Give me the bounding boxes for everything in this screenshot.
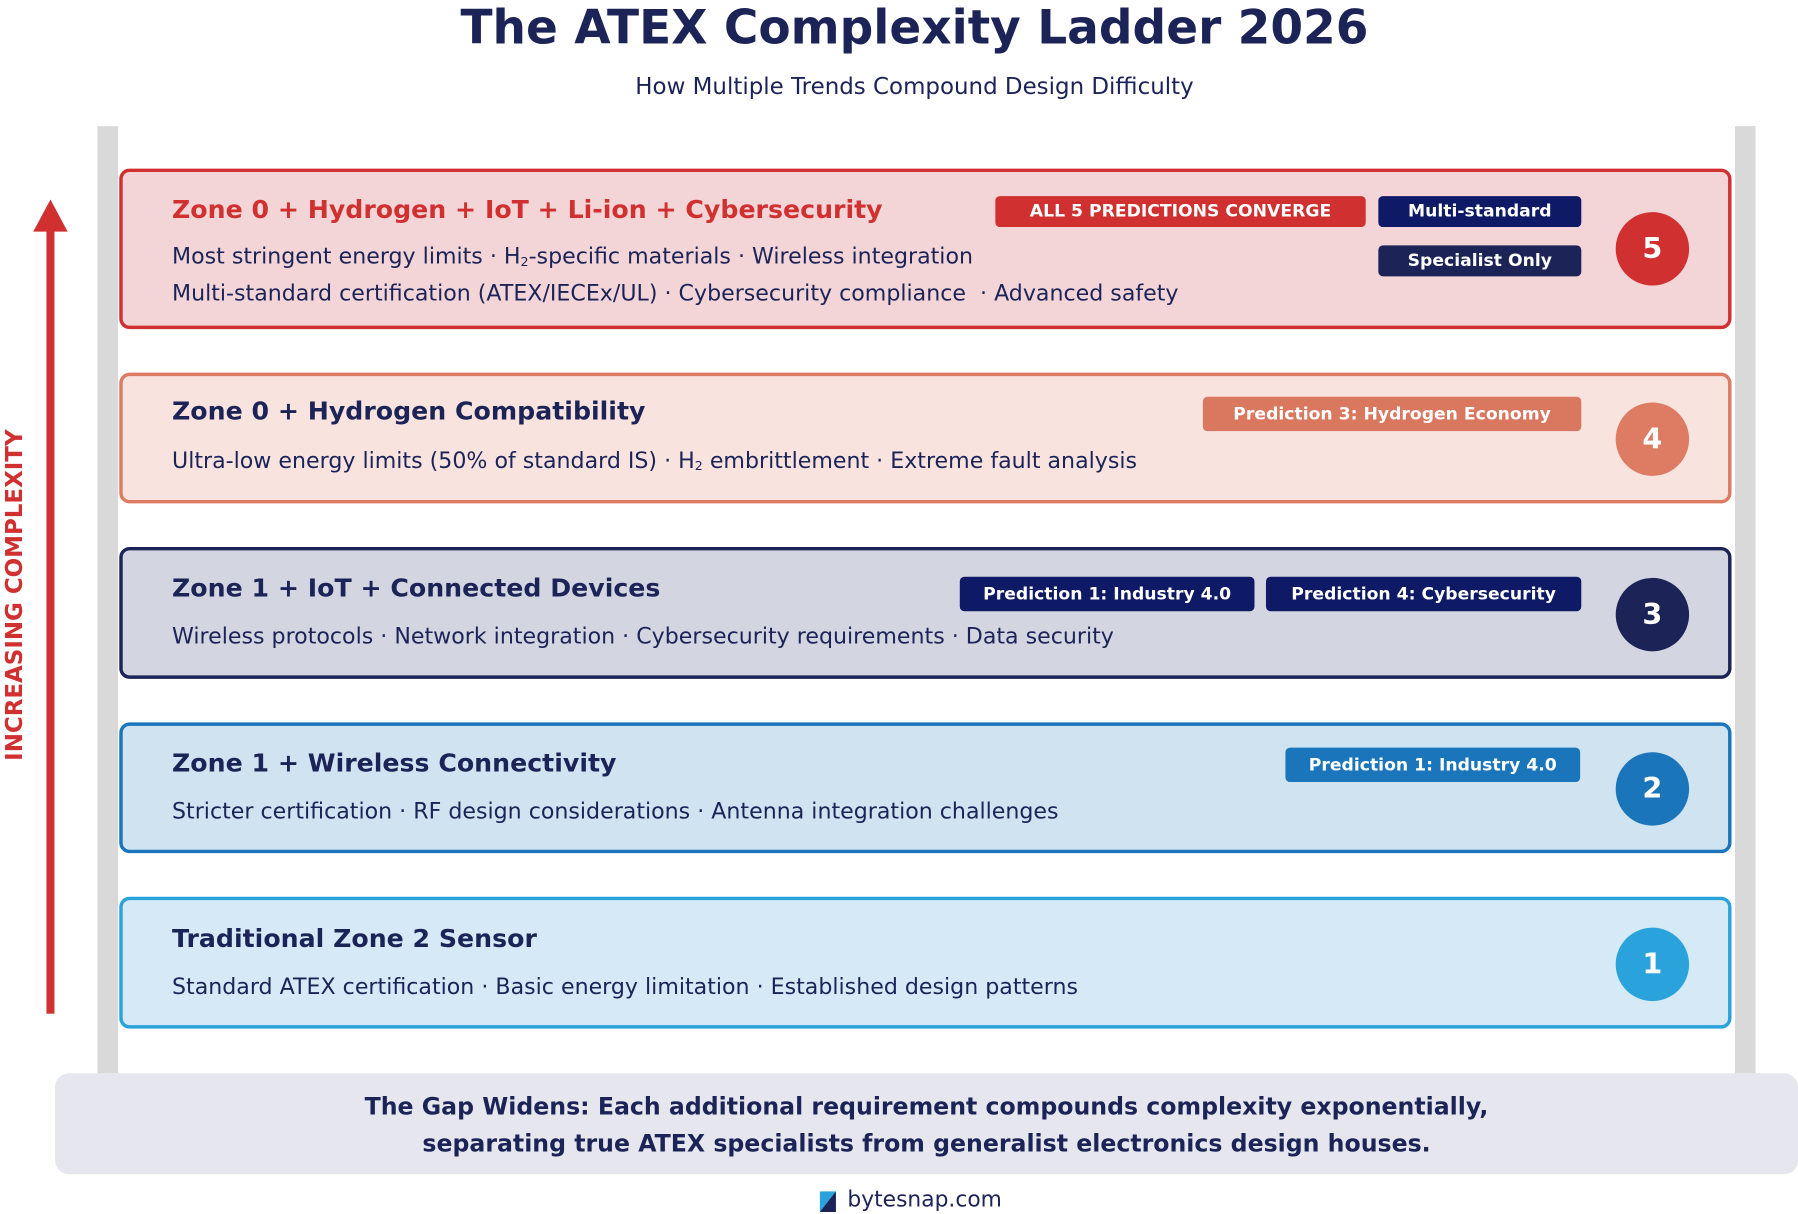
badge: prediction 4	[1266, 577, 1581, 611]
text 1: Standard ATEX certification · Basic energy limitation · Established design patterns	[172, 974, 1078, 1000]
badge: multi-standard: Multi-standard	[1408, 201, 1552, 221]
heading 1: Traditional Zone 2 Sensor	[172, 925, 537, 954]
subtitle: How Multiple Trends Compound Design Difficulty	[635, 72, 1194, 100]
circle 2: 2	[1642, 772, 1662, 805]
heading 5: Zone 0 + Hydrogen + IoT + Li-ion + Cybersecurity	[172, 196, 883, 225]
panel: level 1	[119, 897, 1732, 1029]
circle 3	[1616, 578, 1689, 651]
badge: prediction 3	[1203, 397, 1581, 431]
text 5: Multi-standard certification (ATEX/IECEx/UL) · Cybersecurity compliance · Advanced safety	[172, 280, 1179, 306]
badge: prediction 3: Prediction 3: Hydrogen Economy	[1233, 404, 1551, 424]
panel: level 3	[119, 547, 1732, 679]
circle 5: 5	[1642, 232, 1662, 265]
circle 4: 4	[1642, 422, 1662, 455]
footer logo: bytesnap.com	[847, 1187, 1002, 1212]
text 4: Ultra-low energy limits (50% of standard IS) · H2 embrittlement · Extreme fault analysis	[172, 447, 1137, 474]
axis label: INCREASING COMPLEXITY	[0, 429, 28, 761]
badge: prediction 1: Prediction 1: Industry 4.0	[1309, 755, 1557, 775]
panel: level 4	[119, 373, 1732, 503]
text 5	[172, 243, 1179, 306]
callout: the gap widens: The Gap Widens: Each additional requirement compounds complexity exponentially,	[365, 1093, 1488, 1120]
arrow: increasing complexity	[33, 200, 68, 1014]
badge: prediction 1	[1285, 748, 1580, 782]
panel: level 2	[119, 722, 1732, 853]
callout: the gap widens: separating true ATEX specialists from generalist electronics design houses.	[422, 1129, 1431, 1157]
circle 1: 1	[1642, 947, 1662, 980]
text 3: Wireless protocols · Network integration · Cybersecurity requirements · Data security	[172, 623, 1114, 649]
panel: level 5	[119, 169, 1732, 329]
circle 3: 3	[1642, 597, 1662, 631]
circle 2	[1616, 752, 1689, 826]
circle 5	[1616, 212, 1689, 286]
badge: prediction 1	[960, 577, 1254, 611]
circle 4	[1616, 402, 1689, 476]
badge: converge	[995, 196, 1366, 227]
heading 4: Zone 0 + Hydrogen Compatibility	[172, 398, 645, 427]
badge: multi-standard	[1378, 196, 1581, 227]
callout: the gap widens	[55, 1073, 1798, 1174]
badge: prediction 4: Prediction 4: Cybersecurity	[1291, 584, 1556, 604]
badge: prediction 1: Prediction 1: Industry 4.0	[983, 584, 1231, 604]
title: The ATEX Complexity Ladder 2026	[460, 0, 1368, 55]
circle 1	[1616, 928, 1689, 1001]
text 2: Stricter certification · RF design considerations · Antenna integration challenges	[172, 798, 1059, 824]
badge: converge: ALL 5 PREDICTIONS CONVERGE	[1030, 201, 1331, 221]
heading 3: Zone 1 + IoT + Connected Devices	[172, 574, 660, 603]
badge: specialist: Specialist Only	[1408, 250, 1552, 271]
text 5: Most stringent energy limits · H2-specific materials · Wireless integration	[172, 243, 973, 269]
heading 2: Zone 1 + Wireless Connectivity	[172, 750, 616, 779]
badge: specialist	[1378, 245, 1581, 276]
